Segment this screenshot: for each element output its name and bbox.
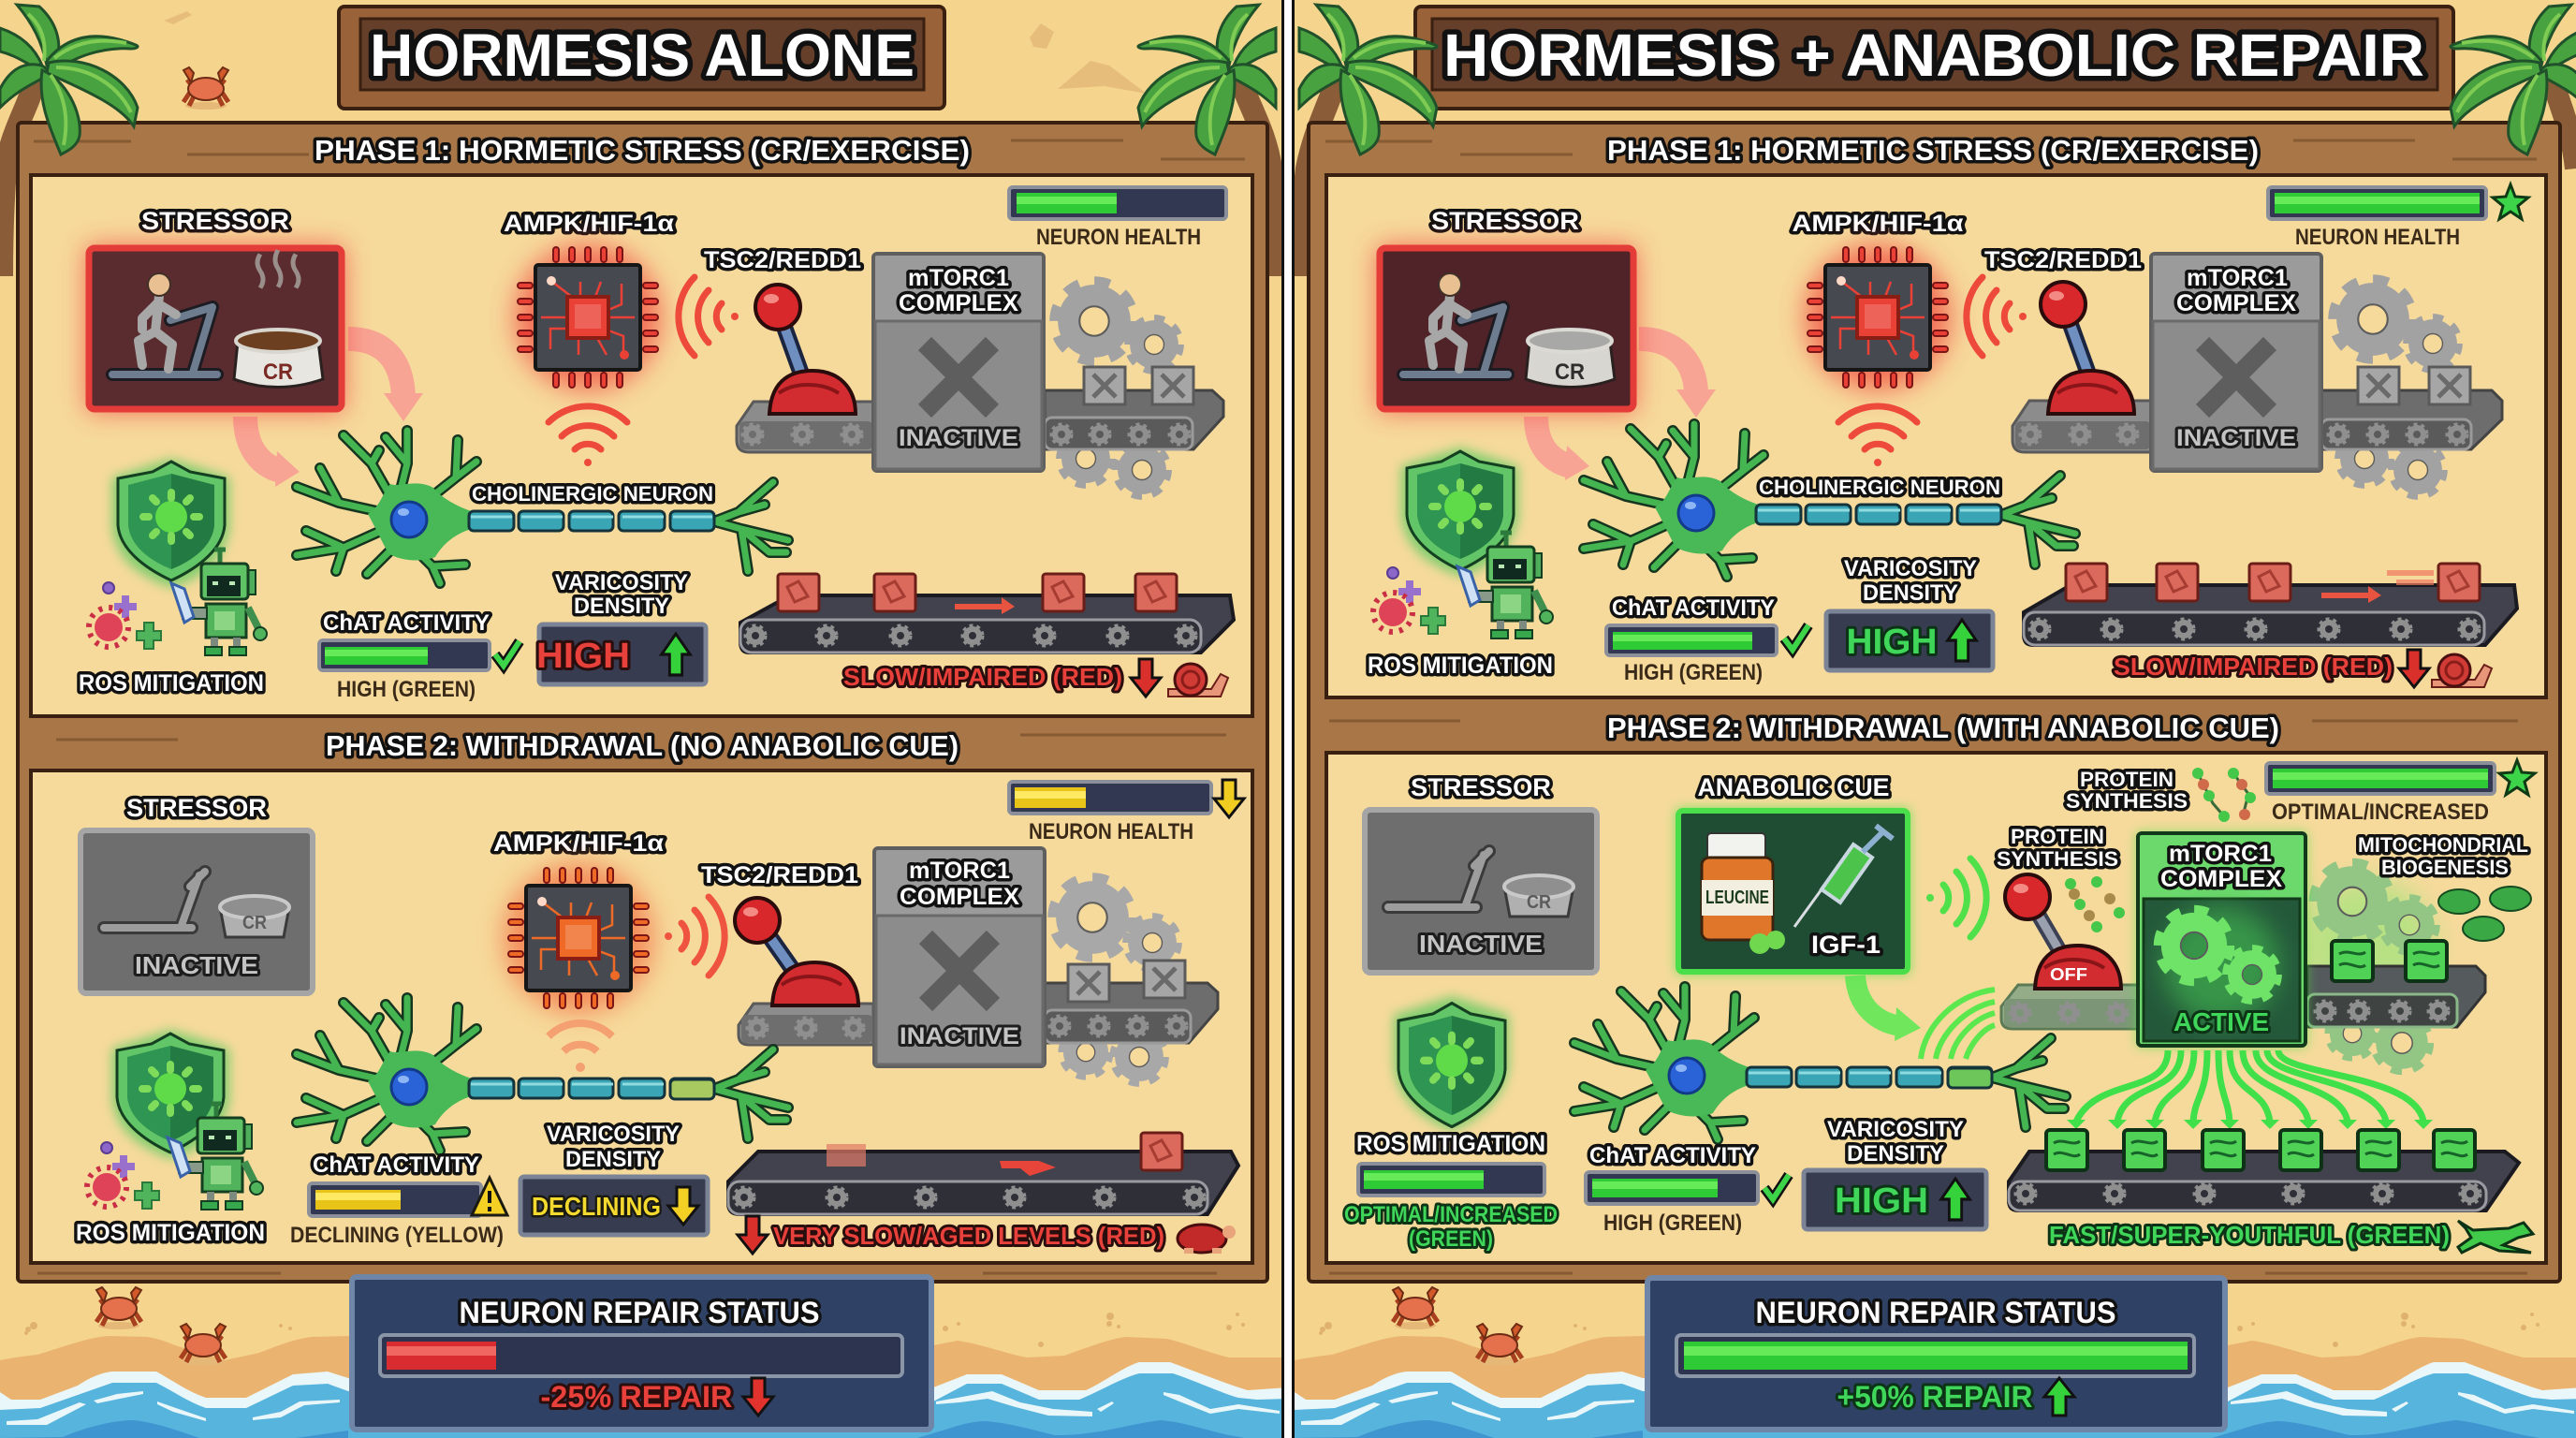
P2 left conveyor and lever: OFF [2050,965,2087,984]
anabolic cue box [1676,808,1910,975]
P1 down arrow [1131,659,1161,697]
neuron repair status panel: -25% REPAIR [541,1380,732,1414]
protein synthesis top label: PROTEIN [2080,768,2174,791]
P2 varicosity box [1804,1170,1986,1229]
P2 ROS shield [112,1030,229,1159]
P2 fast label: FAST/SUPER-YOUTHFUL (GREEN) [2049,1221,2450,1249]
P2 robot [168,1104,263,1210]
protein synthesis second label: SYNTHESIS [1997,847,2118,871]
P2 AMPK chip [504,863,653,1013]
P2 varicosity label: DENSITY [1847,1141,1944,1167]
icon: CR bowl: CR [1555,360,1585,385]
title sign [1415,7,2453,109]
P2 optimal bar [2266,763,2495,794]
P2 ChAT value: HIGH (GREEN) [1603,1211,1742,1236]
P1 neuron label: CHOLINERGIC NEURON [1759,476,2000,499]
P2 ROS value: OPTIMAL/INCREASED [1344,1202,1558,1227]
crabs bottom right [1393,1287,1522,1366]
P2 bottom conveyor [2009,1130,2519,1211]
P2 ROS label: ROS MITIGATION [1356,1131,1545,1157]
P2 mTORC1 complex active: COMPLEX [2160,866,2282,892]
P1 AMPK chip [515,244,661,390]
protein chains top [2192,768,2256,822]
P2 ChAT check [1764,1175,1789,1199]
P1 ChAT value: HIGH (GREEN) [337,677,476,702]
icon: CR bowl [1526,330,1615,388]
P2 varicosity box [520,1177,708,1235]
P2 ChAT label: ChAT ACTIVITY [313,1152,479,1178]
protein synthesis top label: SYNTHESIS [2066,789,2188,813]
P1 varicosity box: HIGH [1846,623,1938,662]
P2 ROS value: (GREEN) [1409,1226,1493,1252]
green arrows to conveyor [2067,1050,2433,1129]
palm fronds left half [0,5,1276,154]
P2 neuron [1574,987,2066,1139]
neuron repair status panel: NEURON REPAIR STATUS [459,1296,820,1329]
P2 ROS shield [1394,996,1509,1131]
P2 gears and right conveyor [1045,879,1218,1082]
P1 neuron health label: NEURON HEALTH [1036,225,1201,250]
wood frame [18,123,1267,1282]
P2 signal to neuron [549,1023,612,1072]
P2 neuron health bar [1009,782,1211,814]
P2 ChAT bar [309,1183,481,1216]
anabolic cue label: ANABOLIC CUE [1698,773,1889,801]
P2 mitochondrial label: MITOCHONDRIAL [2358,833,2528,857]
P1 varicosity box [1826,611,1993,670]
P1 stressor box [1377,245,1636,412]
P1 varicosity label: DENSITY [1863,580,1958,606]
P2 stressor box: CR [242,913,267,933]
P1 ROS particles [1373,567,1445,634]
protein chains second [2065,876,2125,932]
icon: leucine bottle [1702,833,1785,954]
P2 mTORC1 complex active: ACTIVE [2174,1007,2269,1036]
neuron repair status panel [352,1277,931,1430]
RIGHT PANEL: Hormesis + Anabolic Repair [1309,7,2560,1430]
phase 2 heading: PHASE 2: WITHDRAWAL (NO ANABOLIC CUE) [326,729,959,762]
P2 mTORC1 complex: COMPLEX [900,884,1019,910]
neuron repair status panel [1647,1278,2225,1430]
P2 very slow label: VERY SLOW/AGED LEVELS (RED) [773,1222,1164,1250]
P2 bottom conveyor [728,1133,1238,1214]
icon: cheetah [2458,1221,2533,1253]
P1 mTORC1 complex: COMPLEX [2176,290,2296,316]
P1 ROS label: ROS MITIGATION [1368,653,1553,679]
P2 stressor box [1365,810,1597,973]
phase 1 panel [31,175,1252,716]
P1 varicosity label: VARICOSITY [1844,556,1977,581]
P2 varicosity label [1827,1117,1964,1167]
P2 mitochondrial label: BIOGENESIS [2381,856,2509,879]
wood frame [1309,123,2560,1282]
P1 ROS shield [112,459,229,588]
P1 varicosity label [1844,556,1977,606]
P1 ROS particles [89,582,161,649]
protein synthesis second label [1997,825,2118,871]
green signal waves [1926,858,1986,937]
protein synthesis second label: PROTEIN [2011,825,2104,848]
P1 mTORC1 complex [873,254,1044,471]
P2 mTORC1 complex active: mTORC1 [2169,841,2272,867]
icon: mitochondria [2438,887,2531,941]
P1 AMPK label: AMPK/HIF-1α [1792,211,1964,237]
P1 neuron health label: NEURON HEALTH [2295,225,2460,250]
P2 signal to lever [665,897,724,976]
P1 down arrow [2399,650,2429,687]
P1 bottom conveyor [2024,564,2517,645]
P2 stressor box: INACTIVE [135,951,258,979]
icon: CR bowl [234,250,323,388]
icon: treadmill runner [112,273,217,374]
neuron repair status panel: +50% REPAIR [1837,1380,2033,1414]
protein synthesis top label [2066,768,2188,813]
P2 stressor box: CR [1527,892,1551,913]
P2 ROS label: ROS MITIGATION [76,1220,265,1246]
P2 ROS value [1344,1202,1558,1252]
sand decoration [164,11,1147,94]
neuron repair status panel: NEURON REPAIR STATUS [1756,1296,2115,1329]
P1 varicosity label: VARICOSITY [555,570,688,595]
centre divider [1281,0,1295,1438]
P2 mTORC1 complex active [2136,831,2307,1048]
P2 varicosity box: HIGH [1835,1181,1928,1221]
P1 gears and right conveyor [2321,281,2502,495]
P1 mTORC1 complex: INACTIVE [899,425,1018,451]
P1 TSC2 label: TSC2/REDD1 [704,247,861,273]
P1 mTORC1 complex: INACTIVE [2176,425,2296,451]
P2 stressor label: STRESSOR [126,794,267,822]
P1 neuron [297,431,788,583]
P1 AMPK label: AMPK/HIF-1α [504,211,675,237]
P2 TSC2 label: TSC2/REDD1 [701,862,858,888]
P1 signal to neuron [549,406,627,466]
P1 snail [1168,664,1228,697]
P2 varicosity label [547,1122,680,1172]
P1 mTORC1 complex [2151,254,2321,471]
P1 ChAT bar [319,640,490,670]
P2 neuron [297,998,788,1151]
P1 mTORC1 complex: mTORC1 [2187,265,2288,291]
P2 neuron health label: NEURON HEALTH [1029,819,1193,844]
P1 ChAT label: ChAT ACTIVITY [1612,595,1775,621]
icon: treadmill runner [1403,273,1508,374]
P1 signal to neuron [1838,406,1917,466]
P2 green arcs [1921,990,1995,1059]
P2 ChAT value: DECLINING (YELLOW) [290,1223,504,1248]
crabs bottom left [96,1287,226,1366]
P2 AMPK label: AMPK/HIF-1α [493,830,665,857]
P1 neuron health bar [1009,187,1226,219]
P2 gears, mito and right conveyor [2303,864,2531,1070]
P1 left conveyor and lever [737,285,873,452]
icon: CR bowl: CR [263,360,293,385]
P2 stressor box [80,830,313,993]
P1 gears and right conveyor [1045,283,1223,495]
palm trunks [2,80,2576,276]
icon: warning triangle [472,1178,507,1215]
phase 2 panel [31,770,1252,1263]
P1 slow label: SLOW/IMPAIRED (RED) [2114,653,2393,681]
P1 robot [171,550,267,655]
P2 down arrow [738,1216,768,1254]
phase 2 panel [1326,753,2546,1263]
P1 ChAT check [1784,625,1808,650]
P1 mTORC1 complex: mTORC1 [908,265,1009,291]
P2 mTORC1 complex: mTORC1 [909,858,1010,884]
P1 arrows from stressor [1536,339,1716,480]
P2 stressor box: INACTIVE [1419,930,1543,958]
P1 varicosity label [555,570,688,619]
P2 ROS particles [87,1142,159,1209]
P1 AMPK chip [1805,244,1951,390]
P2 optimal label: OPTIMAL/INCREASED [2272,800,2489,825]
title sign: HORMESIS ALONE [370,22,915,89]
P1 ChAT value: HIGH (GREEN) [1624,660,1763,685]
anabolic cue box: IGF-1 [1811,931,1881,959]
P2 ROS bar [1358,1164,1544,1196]
P2 left conveyor and lever [2001,874,2139,1029]
P1 mTORC1 complex: COMPLEX [899,290,1018,316]
P1 signal to lever [1967,277,2027,356]
P2 mTORC1 complex [874,848,1045,1066]
P1 ROS shield [1401,448,1518,577]
P1 star [2493,184,2528,219]
P1 TSC2 label: TSC2/REDD1 [1984,247,2142,273]
P1 neuron label: CHOLINERGIC NEURON [472,482,713,506]
P2 varicosity box: DECLINING [532,1192,661,1221]
P1 ChAT label: ChAT ACTIVITY [323,610,490,636]
title sign [339,7,944,109]
icon: leucine bottle: LEUCINE [1705,888,1769,908]
icon: sand crab top [183,67,228,110]
P1 slow label: SLOW/IMPAIRED (RED) [843,663,1122,691]
icon: IGF-1 syringe [1794,826,1893,927]
P2 mTORC1 complex: INACTIVE [900,1023,1019,1049]
P2 varicosity label: DENSITY [565,1147,661,1172]
P1 neuron [1584,424,2075,577]
P1 varicosity box: HIGH [536,637,630,676]
phase 1 heading: PHASE 1: HORMETIC STRESS (CR/EXERCISE) [1607,134,2259,167]
P1 robot [1457,533,1553,638]
palm fronds right half [1299,5,2576,154]
title sign: HORMESIS + ANABOLIC REPAIR [1443,22,2424,89]
icon: turtle [1178,1225,1236,1253]
P1 signal to lever [679,277,739,356]
P1 left conveyor and lever [2012,282,2151,452]
P1 bottom conveyor [740,574,1234,653]
P1 ROS label: ROS MITIGATION [79,670,264,697]
P2 varicosity label: VARICOSITY [547,1122,680,1147]
phase 1 panel [1326,175,2546,697]
P1 snail [2432,654,2492,687]
P1 neuron health bar [2268,187,2486,219]
P2 stressor label: STRESSOR [1411,773,1551,801]
phase 1 heading: PHASE 1: HORMETIC STRESS (CR/EXERCISE) [315,134,970,167]
phase 2 heading: PHASE 2: WITHDRAWAL (WITH ANABOLIC CUE) [1607,712,2279,744]
P2 varicosity label: VARICOSITY [1827,1117,1964,1142]
background beach left [0,0,1288,1438]
P1 stressor heading: STRESSOR [1431,207,1579,235]
P2 left conveyor and lever [735,898,873,1045]
P1 stressor heading: STRESSOR [141,207,289,235]
anabolic arrow to neuron [1855,976,1921,1041]
P1 ChAT bar [1606,625,1777,655]
LEFT PANEL: Hormesis Alone [18,7,1267,1430]
P1 varicosity box [536,624,706,684]
P2 ChAT bar [1586,1172,1758,1204]
P1 varicosity label: DENSITY [574,594,669,619]
P2 ChAT label: ChAT ACTIVITY [1589,1143,1756,1168]
P2 mitochondrial label [2358,833,2528,879]
P2 star [2499,760,2535,795]
P1 stressor box [86,245,344,412]
P1 arrows from stressor [245,339,423,487]
P2 yellow arrow [1214,780,1244,817]
background beach right [1295,0,2576,1438]
P1 ChAT check [495,641,520,666]
